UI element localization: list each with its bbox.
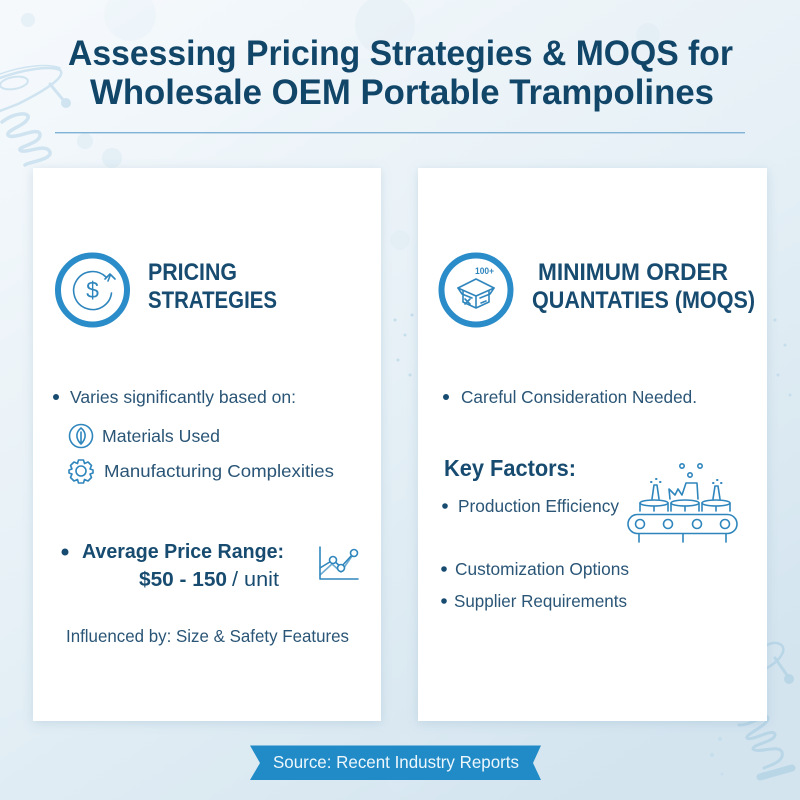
- average price range: Average Price Range:: [82, 541, 284, 563]
- bullet: careful consideration: Careful Consideration Needed.: [461, 387, 697, 407]
- decoration: trampoline and spring top left: [0, 66, 71, 165]
- decoration: trampoline and spring bottom right: [739, 643, 794, 777]
- heading: key factors: Key Factors:: [444, 455, 576, 481]
- icon: dollar cycle: $: [86, 277, 99, 303]
- icon: box 100+: [442, 256, 510, 324]
- icon: box 100+: 100+: [475, 266, 494, 276]
- source ribbon: [250, 746, 541, 780]
- panel: minimum order quantities: [418, 168, 767, 721]
- average price range: [62, 541, 284, 591]
- panel: pricing strategies: [33, 168, 381, 721]
- bullet: customization options: Customization Options: [455, 559, 629, 579]
- icon: dollar cycle: [58, 256, 127, 324]
- average price range: / unit: [232, 569, 279, 591]
- source ribbon: Source: Recent Industry Reports: [273, 752, 519, 772]
- item: materials used: [70, 424, 220, 448]
- heading: pricing strategies: PRICING: [148, 259, 237, 286]
- heading: pricing strategies: STRATEGIES: [148, 287, 277, 314]
- heading: minimum order quantities: MINIMUM ORDER: [538, 259, 728, 286]
- icon: factory conveyor: [628, 464, 737, 542]
- icon: line chart: [320, 547, 358, 579]
- bullet: supplier requirements: Supplier Requirements: [454, 591, 627, 611]
- item: materials used: Materials Used: [102, 426, 220, 446]
- heading: pricing strategies: [148, 259, 277, 314]
- title: [68, 34, 733, 112]
- average price range: $50 - 150: [139, 569, 227, 591]
- note: influenced by: Influenced by: Size & Safety Features: [66, 626, 349, 646]
- item: manufacturing complexities: Manufacturing Complexities: [104, 461, 334, 481]
- title: Wholesale OEM Portable Trampolines: [90, 73, 714, 112]
- heading: minimum order quantities: [532, 259, 755, 314]
- title: Assessing Pricing Strategies & MOQS for: [68, 34, 733, 73]
- heading: minimum order quantities: QUANTATIES (MOQS): [532, 287, 755, 314]
- bullet: varies significantly: Varies significantly based on:: [70, 387, 296, 407]
- bullet: production efficiency: Production Efficiency: [458, 496, 619, 516]
